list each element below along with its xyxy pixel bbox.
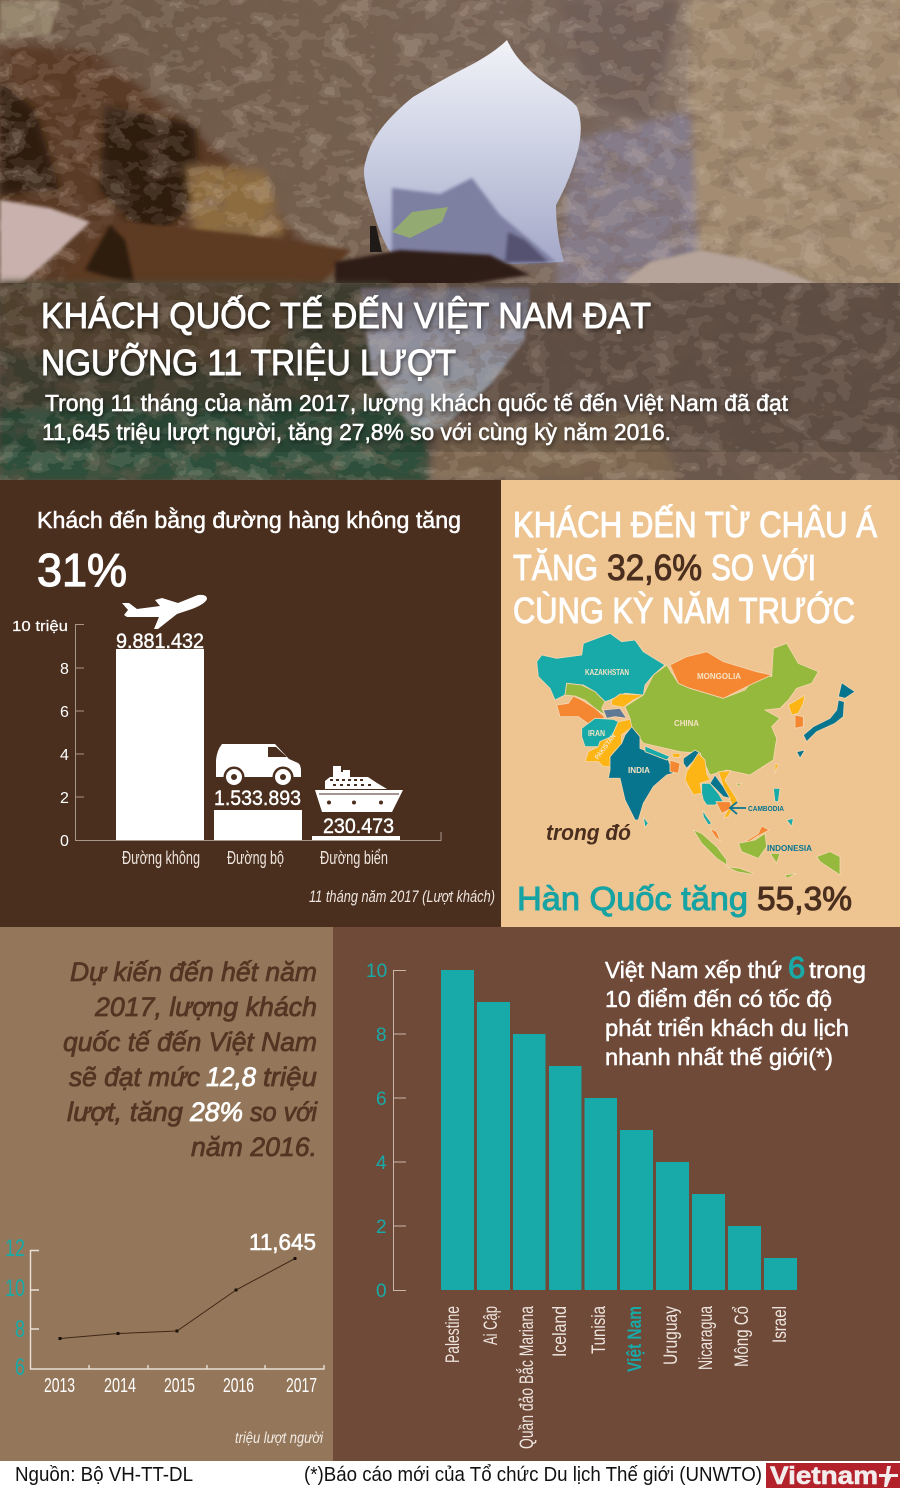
stat: Korea growth: Hàn Quốc tăng <box>517 880 748 917</box>
forecast text: lượt, tăng <box>67 1097 183 1127</box>
intro text: Trong 11 tháng của năm 2017, lượng khách quốc tế đến Việt Nam đã đạt <box>45 390 789 416</box>
chart unit: triệu lượt người <box>235 1430 323 1447</box>
title: NGƯỠNG 11 TRIỆU LƯỢT <box>41 342 456 383</box>
bar chart: ranking: 8 <box>376 1025 387 1046</box>
map labels: MONGOLIA <box>697 672 741 681</box>
bar chart: ranking: 10 <box>366 961 387 982</box>
bar chart: ranking: 2 <box>376 1217 387 1238</box>
bar chart: ranking: Nicaragua <box>696 1306 717 1370</box>
stat: 31%: 31% <box>37 544 127 596</box>
ranking text: phát triển khách du lịch <box>605 1015 849 1041</box>
bar chart: ranking: Iceland <box>550 1306 571 1357</box>
panel: 2017 forecast <box>0 927 333 1461</box>
panel: transport modes <box>0 480 501 927</box>
bar chart: arrivals by transport <box>12 618 441 868</box>
map of Asia <box>537 633 855 878</box>
forecast text: sẽ đạt mức <box>69 1062 200 1092</box>
map labels: IRAN <box>588 729 605 738</box>
line chart: arrivals 2013-2017: 2014 <box>104 1375 136 1397</box>
map labels: INDONESIA <box>767 844 812 853</box>
bar chart: arrivals by transport: 230.473 <box>323 815 394 838</box>
logo: Vietnam+: Vietnam <box>770 1462 878 1490</box>
ranking text: nhanh nhất thế giới(*) <box>605 1044 833 1070</box>
forecast text: năm 2016. <box>191 1132 317 1162</box>
bar chart: arrivals by transport: 0 <box>60 833 69 850</box>
bar chart: arrivals by transport: Đường biển <box>320 848 388 868</box>
panel: fastest growing destinations <box>333 927 900 1461</box>
ranking text: 10 điểm đến có tốc độ <box>605 986 832 1012</box>
icon: plane <box>122 595 207 629</box>
bar chart: arrivals by transport: 9.881.432 <box>116 630 204 653</box>
forecast text: triệu <box>263 1062 317 1092</box>
bar chart: arrivals by transport: Đường không <box>122 848 200 868</box>
ranking text: Việt Nam xếp thứ <box>605 957 782 983</box>
bar chart: arrivals by transport: Đường bộ <box>227 848 284 868</box>
forecast text <box>63 957 318 1162</box>
line chart: arrivals 2013-2017: 2016 <box>223 1375 254 1397</box>
bar chart: ranking: Quần đảo Bắc Mariana <box>516 1306 538 1449</box>
stat: Korea growth: 55,3% <box>757 880 852 917</box>
cave opening <box>364 40 581 268</box>
forecast text: so với <box>250 1097 318 1127</box>
heading: Asia growth: TĂNG <box>513 547 598 588</box>
heading: Asia growth: 32,6% <box>607 547 702 588</box>
icon: van <box>216 744 301 788</box>
intro text <box>42 390 789 445</box>
stat: Korea growth <box>517 880 852 917</box>
panel: Asia arrivals <box>501 480 900 927</box>
forecast text: 2017, lượng khách <box>94 992 317 1022</box>
bar chart: ranking: 4 <box>376 1153 387 1174</box>
hero photo: cave <box>0 0 900 480</box>
forecast text: quốc tế đến Việt Nam <box>63 1027 317 1057</box>
report note: (*)Báo cáo mới của Tổ chức Du lịch Thế giới (UNWTO) <box>304 1464 762 1486</box>
title: KHÁCH QUỐC TẾ ĐẾN VIỆT NAM ĐẠT <box>41 294 651 336</box>
bar chart: ranking: 0 <box>376 1281 387 1302</box>
chart note: 11 tháng năm 2017 (Lượt khách) <box>309 887 495 906</box>
bar chart: arrivals by transport: 2 <box>60 790 69 807</box>
line chart: arrivals 2013-2017: 8 <box>15 1316 25 1343</box>
heading: air arrivals: Khách đến bằng đường hàng không tăng <box>37 507 461 533</box>
icon: ship <box>315 766 403 812</box>
intro text: 11,645 triệu lượt người, tăng 27,8% so với cùng kỳ năm 2016. <box>42 419 671 445</box>
line chart: arrivals 2013-2017: 10 <box>5 1275 25 1302</box>
map labels: PAKISTAN <box>594 733 618 761</box>
bar chart: arrivals by transport: 6 <box>60 704 69 721</box>
forecast text: 28% <box>189 1097 243 1127</box>
bar chart: ranking: Ai Cập <box>481 1306 502 1345</box>
ranking text <box>605 950 866 1070</box>
line chart: arrivals 2013-2017: 11,645 <box>249 1229 316 1255</box>
bar chart: ranking: Tunisia <box>589 1306 610 1354</box>
line chart: arrivals 2013-2017: 2017 <box>286 1375 317 1397</box>
map labels: KAZAKHSTAN <box>585 668 629 677</box>
lit rocks and shore <box>0 200 90 285</box>
bar chart: ranking: 6 <box>376 1089 387 1110</box>
water and ground <box>0 283 900 480</box>
map labels: CAMBODIA <box>748 806 784 813</box>
bar chart: ranking: Việt Nam <box>625 1306 646 1372</box>
bar chart: arrivals by transport: 10 triệu <box>12 618 68 635</box>
label: of which: trong đó <box>546 820 631 845</box>
map labels <box>585 668 812 853</box>
bar chart: arrivals by transport: 4 <box>60 747 69 764</box>
line chart: arrivals 2013-2017 <box>5 1229 324 1397</box>
bar chart: ranking: Palestine <box>443 1306 464 1363</box>
bar chart: arrivals by transport: 8 <box>60 661 69 678</box>
forecast text: 12,8 <box>206 1062 256 1092</box>
bar chart: ranking: Mông Cổ <box>732 1306 753 1367</box>
forecast text: Dự kiến đến hết năm <box>70 957 317 987</box>
bar chart: ranking: Israel <box>770 1306 791 1343</box>
ranking text: trong <box>809 957 866 983</box>
map labels: INDIA <box>628 766 650 775</box>
bar chart: arrivals by transport: 1.533.893 <box>214 787 301 810</box>
source: Nguồn: Bộ VH-TT-DL <box>15 1464 193 1486</box>
ranking text: 6 <box>788 950 805 985</box>
line chart: arrivals 2013-2017: 6 <box>15 1354 25 1381</box>
line chart: arrivals 2013-2017: 12 <box>5 1235 25 1262</box>
title <box>41 294 651 383</box>
map labels: CHINA <box>674 719 699 728</box>
line chart: arrivals 2013-2017: 2015 <box>164 1375 195 1397</box>
bar chart: ranking <box>366 961 797 1449</box>
arrow: Cambodia <box>730 802 746 814</box>
heading: Asia growth <box>513 504 877 631</box>
heading: Asia growth: SO VỚI <box>711 547 816 588</box>
bar chart: ranking: Uruguay <box>661 1306 682 1365</box>
line chart: arrivals 2013-2017: 2013 <box>44 1375 75 1397</box>
footer <box>0 1461 900 1490</box>
